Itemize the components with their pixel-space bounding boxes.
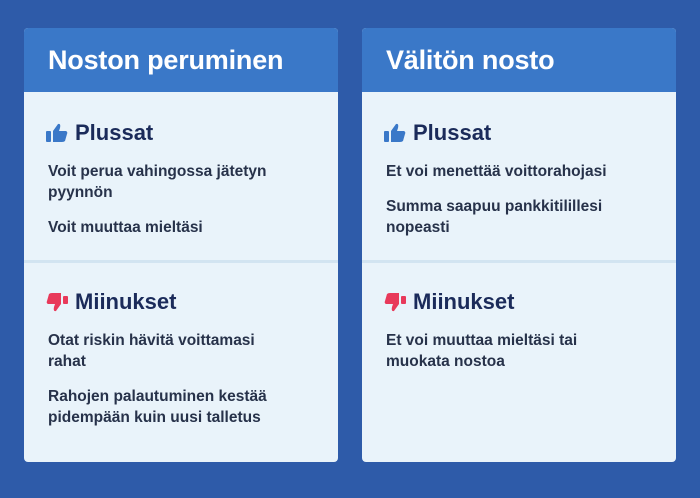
minus heading: Miinukset bbox=[413, 289, 514, 314]
panel: Välitön nosto bbox=[362, 28, 676, 462]
heading: Noston peruminen bbox=[24, 28, 338, 92]
panel: Noston peruminen bbox=[24, 28, 338, 462]
plus text 2: Summa saapuu pankkitilillesi nopeasti bbox=[386, 198, 602, 236]
minus text: Et voi muuttaa mieltäsi tai muokata nostoa bbox=[386, 332, 577, 370]
plus text: Et voi menettää voittorahojasi bbox=[386, 163, 606, 180]
minus text 2: Rahojen palautuminen kestää pidempään kuin uusi talletus bbox=[48, 388, 267, 426]
heading: Noston peruminen: Noston peruminen bbox=[48, 45, 283, 75]
minus text: Otat riskin hävitä voittamasi rahat bbox=[48, 332, 255, 370]
minus heading: Miinukset bbox=[75, 289, 176, 314]
plus text 2: Voit muuttaa mieltäsi bbox=[48, 219, 203, 236]
plus heading: Plussat bbox=[75, 120, 153, 145]
heading: Välitön nosto: Välitön nosto bbox=[386, 45, 554, 75]
heading: Välitön nosto bbox=[362, 28, 676, 92]
plus heading: Plussat bbox=[413, 120, 491, 145]
plus text: Voit perua vahingossa jätetyn pyynnön bbox=[48, 163, 266, 201]
